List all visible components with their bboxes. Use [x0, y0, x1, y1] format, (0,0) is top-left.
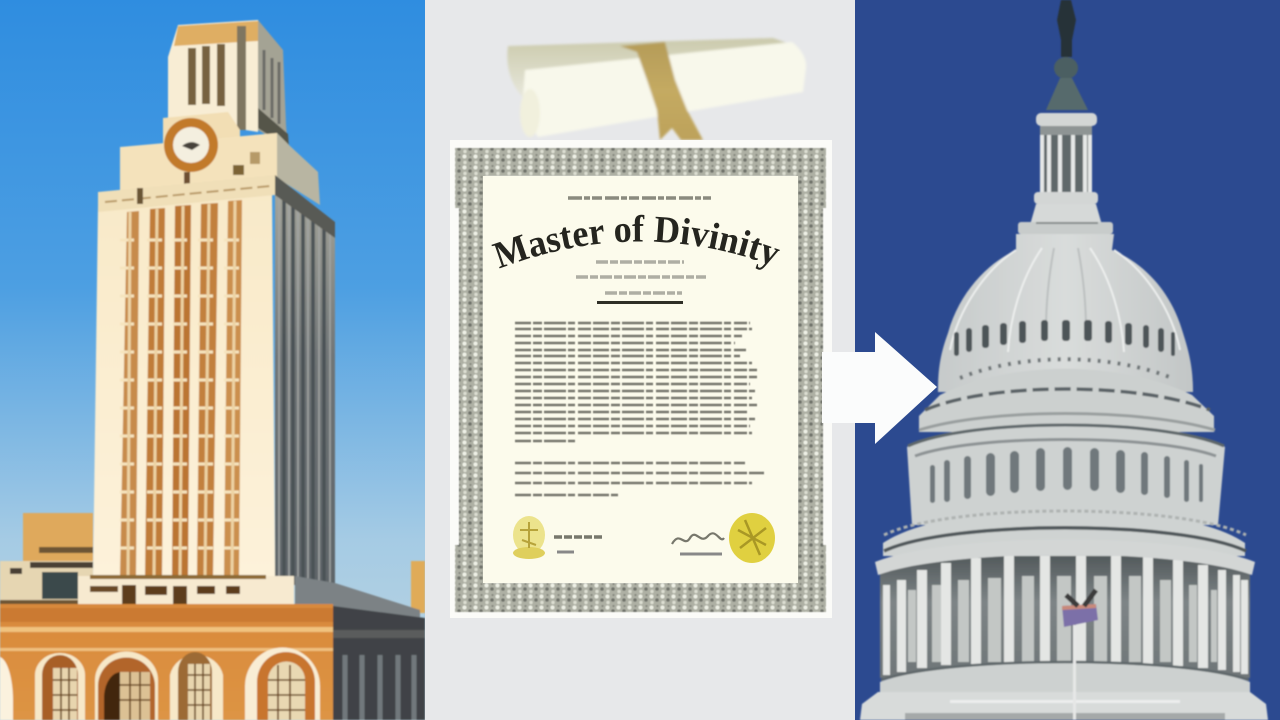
- orange brick facade: [0, 604, 333, 720]
- upper drum: [907, 423, 1225, 525]
- icon: rolled diploma scroll: [507, 38, 806, 140]
- tower base terrace: [78, 575, 420, 625]
- panel: diploma background: [425, 0, 855, 720]
- dome shell: [938, 234, 1193, 392]
- capitol dome: [860, 0, 1268, 720]
- diploma subtitle lines: [576, 262, 706, 293]
- signature right: [672, 533, 724, 554]
- diploma rule: [597, 301, 683, 304]
- gold seal left: [513, 516, 545, 559]
- panel: university tower: [0, 0, 425, 720]
- diploma body text: [515, 323, 764, 495]
- gold seal right: [729, 513, 775, 563]
- panel: diploma certificate: [450, 140, 832, 618]
- arched windows: [0, 647, 320, 720]
- icon: flag on pole: [1062, 590, 1098, 720]
- tower shaft: [93, 175, 335, 585]
- dark shaded wing: [333, 606, 425, 720]
- arrow: diploma to capitol: [822, 332, 937, 444]
- ornate border: [455, 148, 826, 612]
- drum base: [860, 662, 1268, 720]
- signature left: [554, 537, 604, 552]
- tower window strips: [120, 200, 242, 577]
- lower colonnade: [880, 552, 1250, 678]
- icon: tower clock: [164, 118, 218, 184]
- diploma top line: [568, 196, 711, 200]
- panel: capitol background: [855, 0, 1280, 720]
- dome statue and lantern: [1018, 0, 1113, 234]
- background buildings: [0, 513, 425, 613]
- upper cornice: [875, 509, 1255, 575]
- dome balustrade band: [919, 359, 1215, 432]
- diploma title: Master of Divinity: [492, 214, 780, 270]
- tower crown: [120, 20, 320, 205]
- dome windows: [954, 320, 1175, 356]
